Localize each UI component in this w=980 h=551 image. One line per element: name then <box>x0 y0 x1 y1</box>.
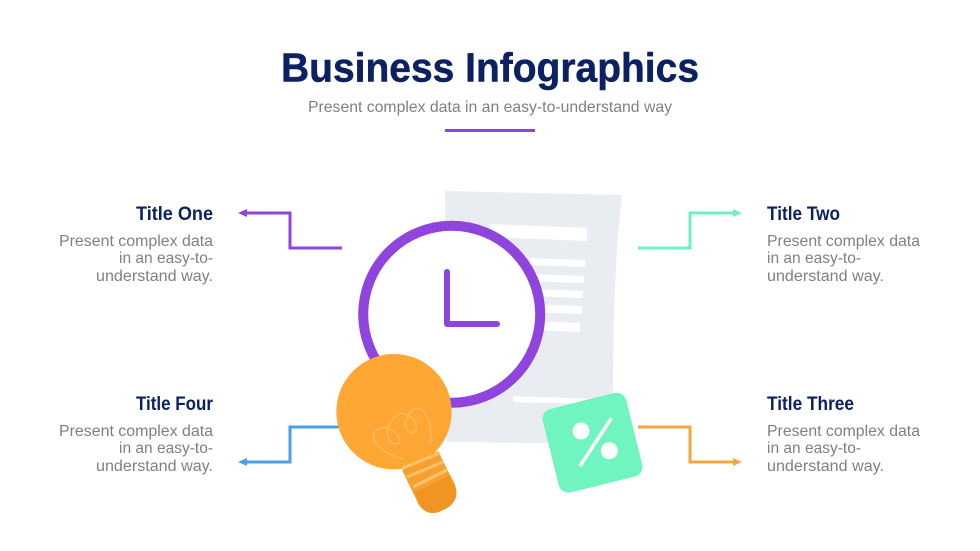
subtitle: Present complex data in an easy-to-understand way <box>308 99 672 116</box>
text block: title one: in an easy-to- <box>119 250 213 267</box>
icon: document <box>445 191 622 444</box>
title: Business Infographics <box>281 44 699 90</box>
text block: title three: in an easy-to- <box>767 440 861 457</box>
heading: title two: Title Two <box>767 204 840 225</box>
text block: title three: Present complex data <box>767 423 920 440</box>
text block: title four: in an easy-to- <box>119 440 213 457</box>
panel: title four <box>59 394 214 475</box>
text block: title one: understand way. <box>96 268 213 285</box>
text block: title four: understand way. <box>96 458 213 475</box>
text block: title three <box>767 423 920 475</box>
text block: title two: Present complex data <box>767 233 920 250</box>
heading: title three: Title Three <box>767 394 854 415</box>
text block: title one: Present complex data <box>59 233 213 250</box>
text block: title two: in an easy-to- <box>767 250 861 267</box>
panel: title two <box>767 204 920 285</box>
panel: title one <box>59 204 213 285</box>
heading: title four: Title Four <box>136 394 214 415</box>
text block: title four <box>59 423 213 475</box>
icon: light bulb <box>336 354 456 513</box>
title underline <box>445 129 535 132</box>
arrow: title one <box>238 209 342 248</box>
text block: title four: Present complex data <box>59 423 213 440</box>
text block: title two: understand way. <box>767 268 884 285</box>
arrow: title three <box>638 427 742 466</box>
text block: title two <box>767 233 920 285</box>
arrow: title two <box>638 209 742 248</box>
panel: title three <box>767 394 920 475</box>
icon: clock <box>363 226 540 403</box>
icon: percent tile <box>540 391 645 495</box>
arrow: title four <box>238 427 342 466</box>
heading: title one: Title One <box>136 204 213 225</box>
text block: title three: understand way. <box>767 458 884 475</box>
text block: title one <box>59 233 213 285</box>
